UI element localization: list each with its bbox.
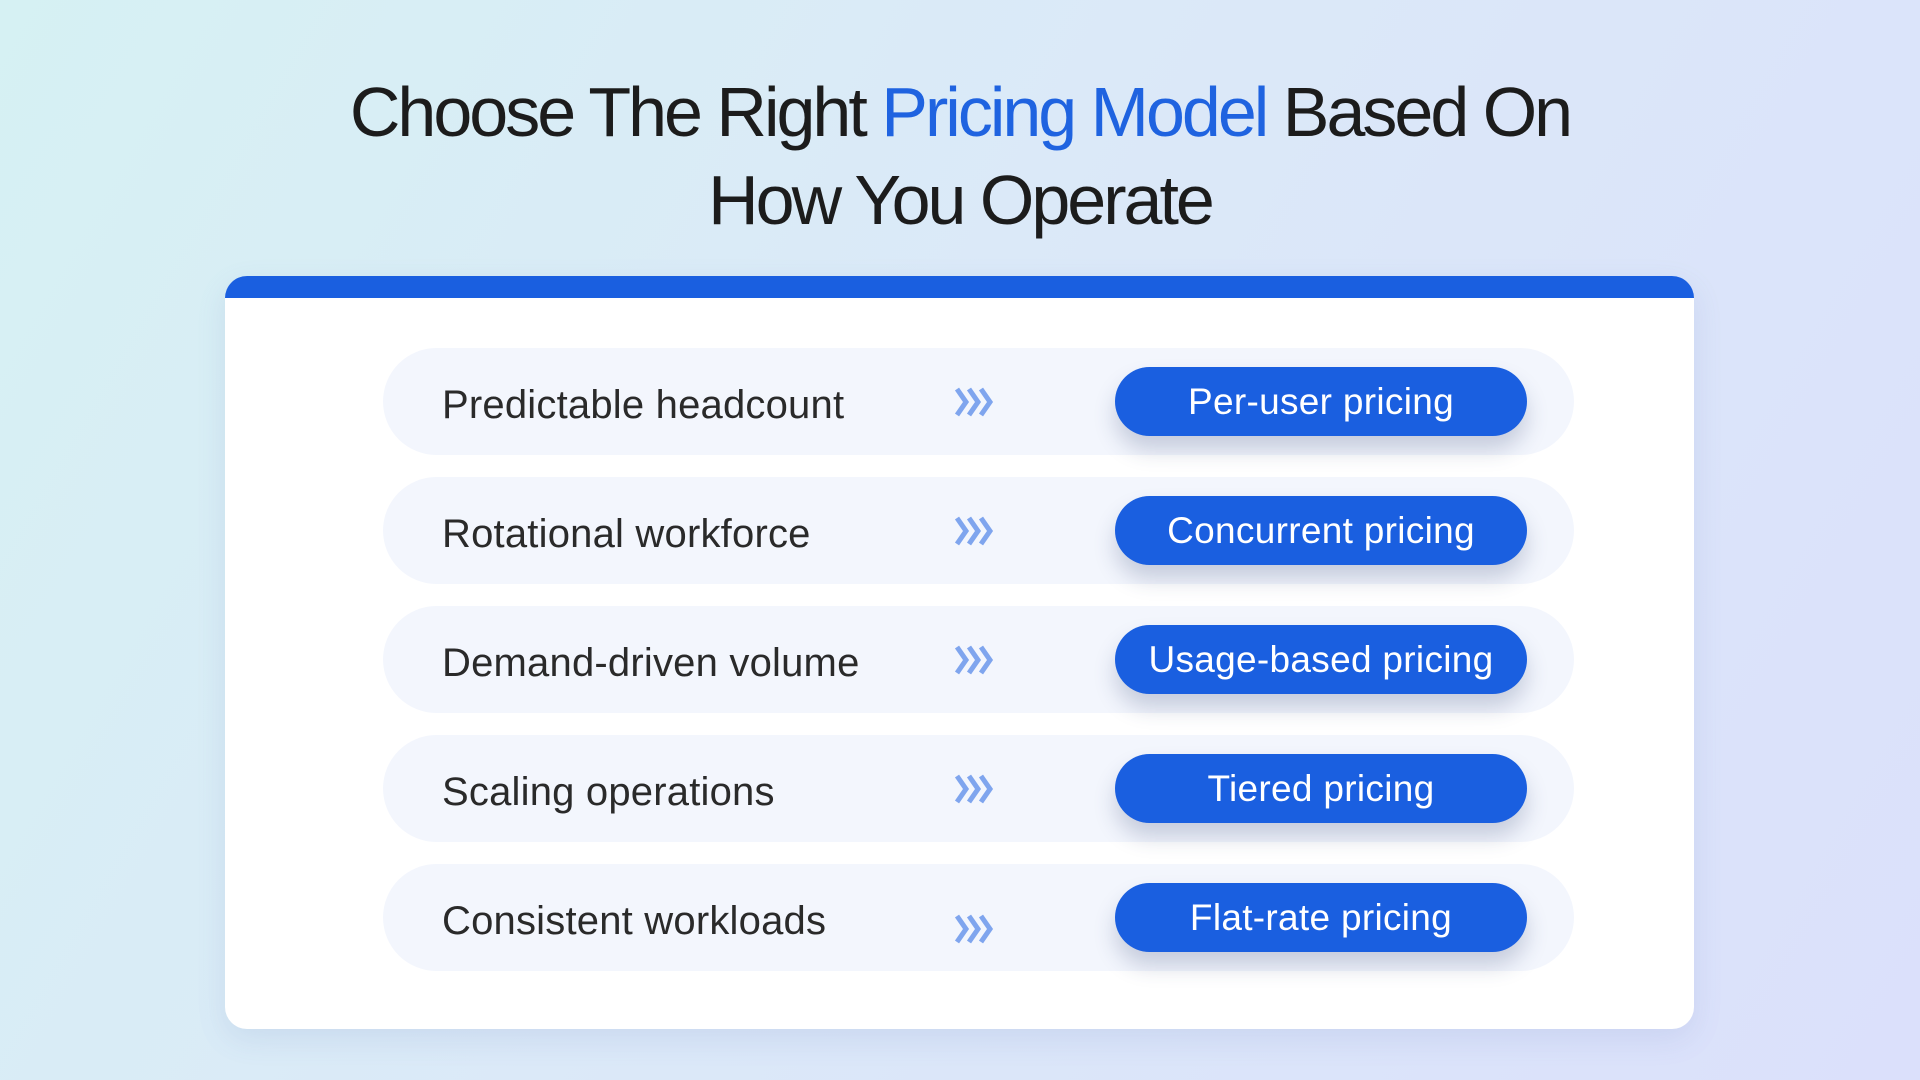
row: rotational workforce: Concurrent pricing: [1167, 510, 1475, 551]
panel: card: [225, 276, 1694, 1029]
row: consistent workloads: Consistent workloads: [442, 899, 826, 943]
row: consistent workloads: Flat-rate pricing: [1190, 897, 1452, 938]
row: consistent workloads: [383, 864, 1574, 971]
row: scaling operations: [383, 735, 1574, 842]
row: scaling operations: Tiered pricing: [1208, 768, 1434, 809]
row: demand-driven volume: Usage-based pricing: [1148, 639, 1494, 680]
row: predictable headcount: Per-user pricing: [1188, 381, 1454, 422]
row: demand-driven volume: [383, 606, 1574, 713]
row: predictable headcount: Predictable headcount: [442, 383, 844, 427]
row: rotational workforce: [383, 477, 1574, 584]
row: rotational workforce: Rotational workforce: [442, 512, 811, 556]
row: demand-driven volume: Demand-driven volume: [442, 641, 860, 685]
title: [350, 73, 1570, 239]
title: Choose The Right Pricing Model Based On: [350, 73, 1570, 151]
row: scaling operations: Scaling operations: [442, 770, 775, 814]
title: How You Operate: [708, 161, 1212, 239]
row: predictable headcount: [383, 348, 1574, 455]
